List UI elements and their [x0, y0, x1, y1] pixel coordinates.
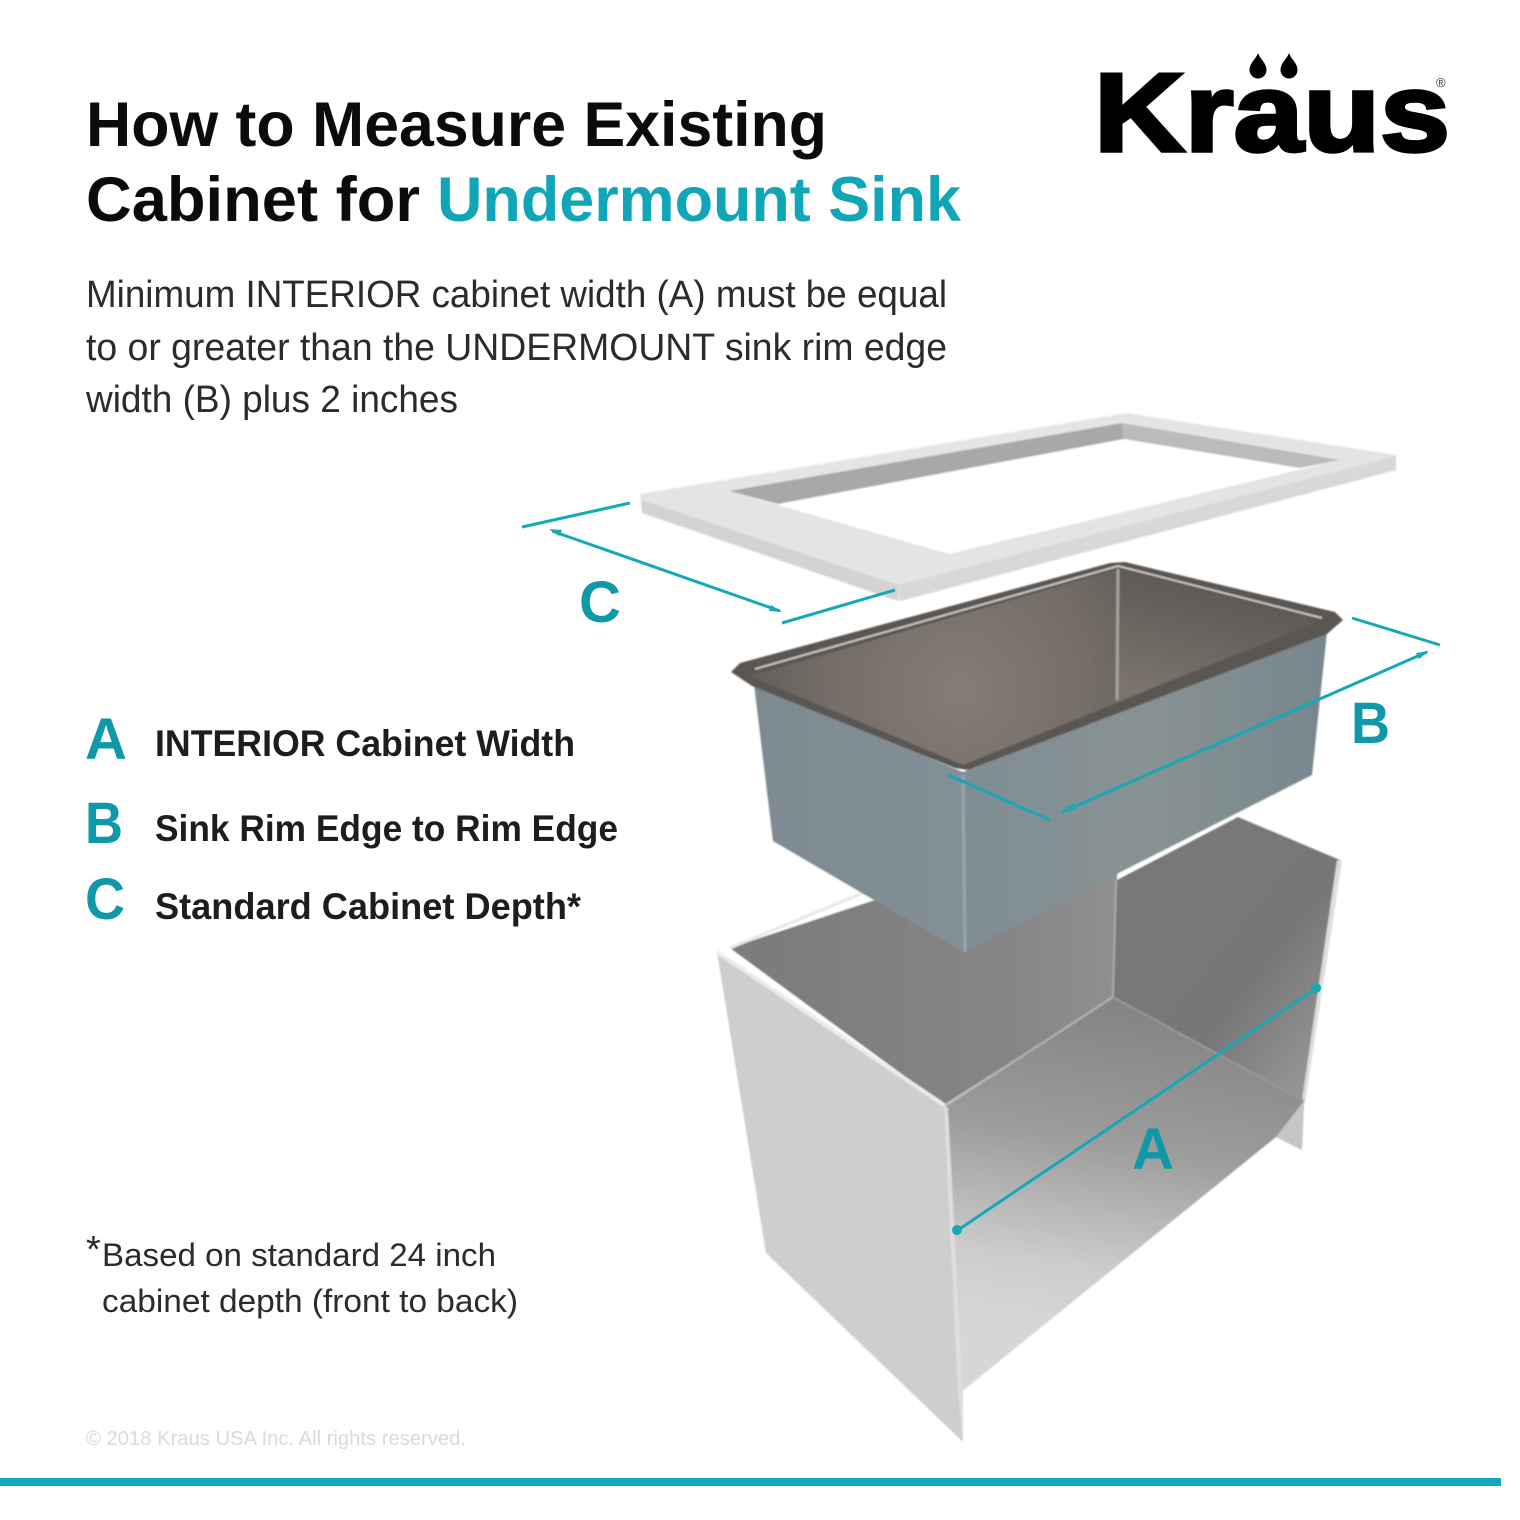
logo: Kraus: Kraus — [1094, 51, 1450, 175]
cabinet floor and front opening — [944, 997, 1304, 1393]
logo: Kraus: ® — [1436, 75, 1446, 90]
sink basin interior — [750, 569, 1322, 765]
intro text: to or greater than the UNDERMOUNT sink rim edge — [86, 327, 947, 369]
right panel end — [1276, 1101, 1304, 1150]
legend item C: C — [85, 867, 125, 932]
dimension C — [522, 503, 895, 635]
dimension C: C — [579, 570, 621, 635]
legend item A — [85, 707, 575, 772]
legend item B — [85, 791, 618, 856]
title: How to Measure Existing — [86, 90, 827, 160]
back wall right — [1113, 817, 1340, 1101]
dimension A: A — [1132, 1117, 1174, 1182]
cabinet — [717, 817, 1342, 1442]
copyright: © 2018 Kraus USA Inc. All rights reserved. — [86, 1428, 466, 1450]
dimension B: B — [1351, 691, 1390, 756]
sink rim — [731, 562, 1343, 770]
intro text: width (B) plus 2 inches — [85, 379, 458, 421]
legend — [85, 707, 618, 932]
sink — [731, 562, 1343, 952]
title — [86, 90, 962, 235]
bottom bar — [0, 1478, 1501, 1486]
left side panel — [717, 952, 963, 1442]
intro text: Minimum INTERIOR cabinet width (A) must be equal — [86, 274, 947, 316]
title: Undermount Sink — [437, 165, 962, 235]
legend item B: B — [85, 791, 123, 856]
sink left wall — [754, 684, 963, 952]
dimension A — [954, 984, 1320, 1234]
legend item C — [85, 867, 582, 932]
intro text — [85, 274, 947, 421]
title: Cabinet for — [86, 165, 420, 235]
footnote — [86, 1229, 518, 1319]
dimension B — [948, 618, 1440, 820]
legend item A: A — [85, 707, 127, 772]
back wall left — [730, 820, 1117, 1105]
legend item A: INTERIOR Cabinet Width — [155, 723, 575, 764]
footnote: * — [86, 1229, 101, 1271]
countertop frame — [640, 413, 1396, 601]
footnote: Based on standard 24 inch — [102, 1237, 496, 1273]
sink right wall — [963, 632, 1327, 952]
footnote: cabinet depth (front to back) — [102, 1283, 518, 1319]
legend item C: Standard Cabinet Depth* — [155, 886, 582, 927]
legend item B: Sink Rim Edge to Rim Edge — [155, 808, 618, 849]
